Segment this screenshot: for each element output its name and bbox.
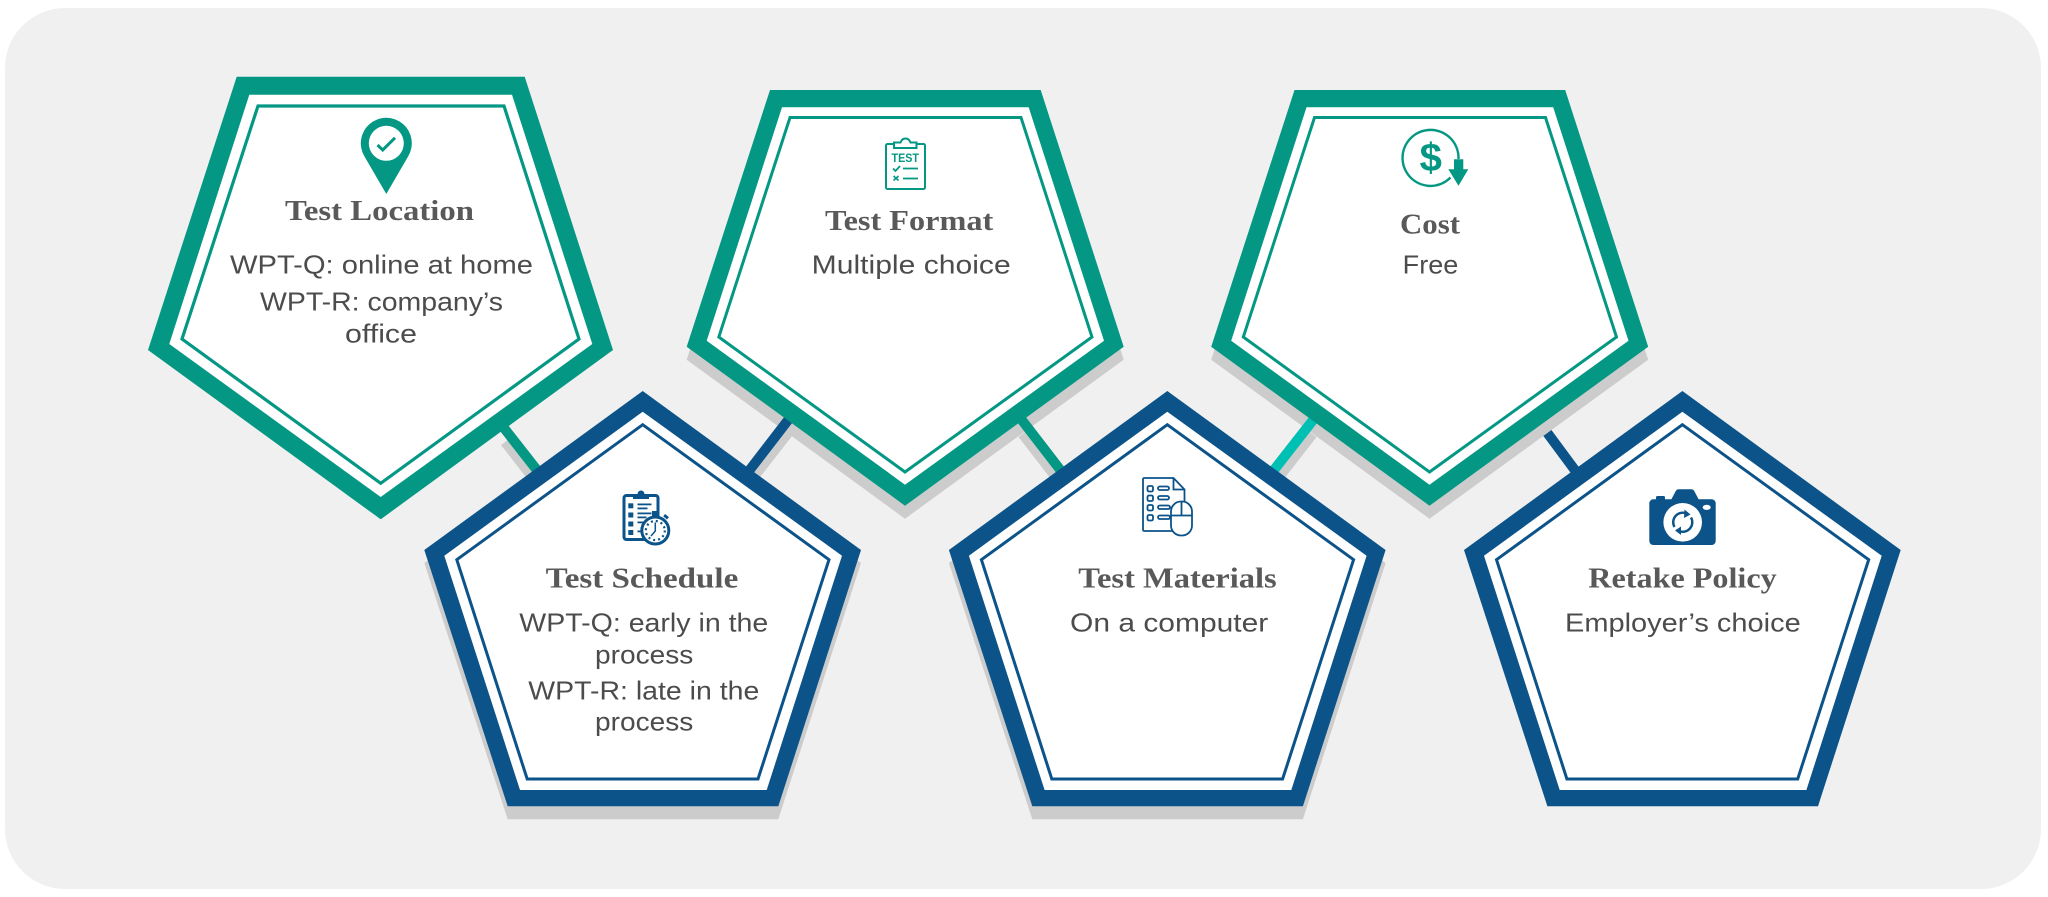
heading: test location: Test Location — [285, 195, 474, 227]
heading: test materials: Test Materials — [1078, 562, 1277, 594]
text: test format details: Multiple choice — [812, 249, 1011, 279]
icon: dollar with down arrow — [1403, 130, 1468, 186]
icon: document with mouse — [1143, 478, 1192, 536]
text: cost details: Free — [1403, 249, 1458, 279]
connector: cost to retake policy — [1540, 423, 1580, 477]
heading: test schedule: Test Schedule — [546, 562, 738, 594]
panel: cost — [1211, 90, 1648, 506]
connector: test location to test schedule — [497, 419, 540, 474]
text: test schedule details: process — [595, 639, 693, 669]
icon: test clipboard — [886, 138, 925, 189]
text: test location details: WPT-Q: online at home — [230, 249, 533, 279]
connector: test schedule to test format — [745, 415, 792, 476]
heading: test format: Test Format — [825, 205, 994, 237]
panel: retake policy — [1464, 391, 1901, 806]
panel: test format — [687, 90, 1124, 506]
connector: test format to test materials — [1018, 415, 1065, 476]
heading: cost: Cost — [1400, 208, 1460, 240]
icon: dollar with down arrow: $ — [1420, 136, 1442, 180]
text: test schedule details: WPT-R: late in the — [528, 675, 759, 705]
heading: retake policy: Retake Policy — [1588, 562, 1777, 594]
panel: test schedule — [424, 391, 861, 806]
connector: test materials to cost — [1270, 415, 1317, 475]
icon: test clipboard: TEST — [892, 153, 919, 165]
text: test materials details: On a computer — [1070, 608, 1269, 638]
icon: clipboard with stopwatch — [624, 491, 669, 544]
text: test schedule details: process — [595, 707, 693, 737]
panel: test materials — [949, 391, 1386, 806]
icon: location pin with check — [361, 118, 412, 194]
text: test location details: office — [345, 318, 417, 348]
text: test schedule details: WPT-Q: early in the — [519, 608, 768, 638]
text: retake policy details: Employer’s choice — [1565, 608, 1801, 638]
panel: test location — [148, 77, 613, 519]
text: test location details: WPT-R: company’s — [260, 287, 503, 317]
text: test location details — [230, 249, 533, 348]
icon: camera with refresh arrows — [1649, 489, 1716, 545]
text: test schedule details — [519, 608, 768, 737]
